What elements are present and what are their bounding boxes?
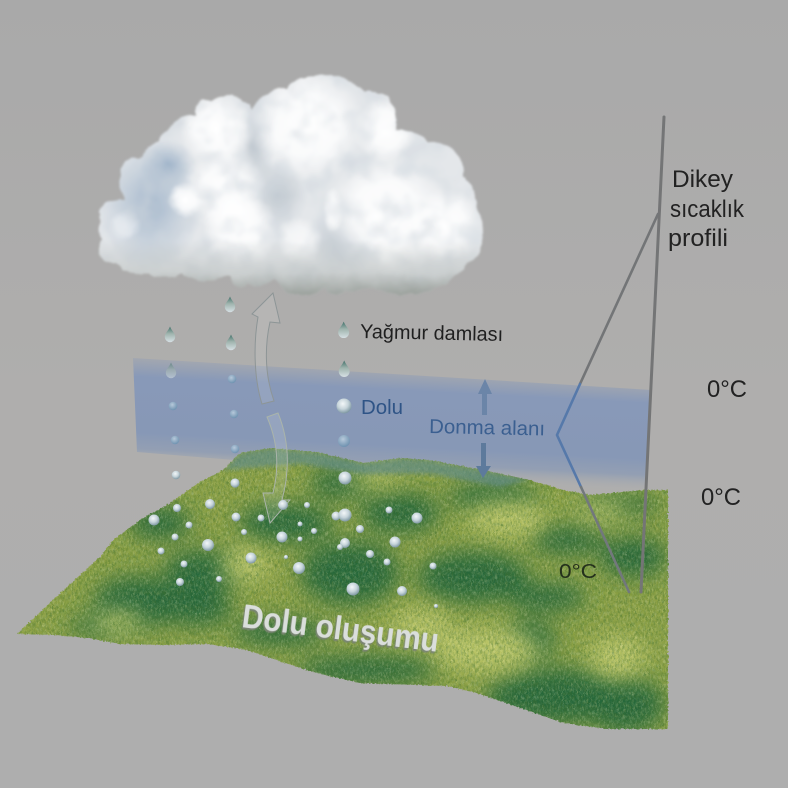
label: Dikey sıcaklık profili: sıcaklık — [670, 196, 745, 223]
infographic: hail formation — [17, 74, 746, 730]
vertical temperature profile lines — [557, 117, 664, 592]
hail stones on the ground — [148, 472, 438, 608]
falling hail stones — [169, 375, 350, 479]
label: 0°C lower: 0°C — [701, 484, 741, 511]
arrow: freezing zone down — [476, 443, 491, 478]
legend raindrop icon — [338, 322, 349, 338]
label: Dikey sıcaklık profili — [668, 166, 745, 252]
label: Dolu: Dolu — [361, 397, 403, 419]
arrow: freezing zone up — [478, 379, 492, 415]
label: Dikey sıcaklık profili: Dikey — [672, 166, 733, 193]
arrow: downdraft — [263, 413, 290, 523]
label: Dikey sıcaklık profili: profili — [668, 225, 728, 252]
falling raindrops — [165, 296, 236, 378]
cloud — [90, 65, 490, 300]
label: Yağmur damlası: Yağmur damlası — [360, 321, 503, 346]
title: Dolu oluşumu: Dolu oluşumu — [240, 597, 441, 659]
far hill edge seen through the freezing zone — [223, 448, 530, 487]
grass field — [17, 448, 669, 730]
arrow: updraft — [252, 293, 280, 404]
label: 0°C upper: 0°C — [707, 376, 747, 403]
legend hail stone icon — [336, 398, 352, 414]
label: Donma alanı: Donma alanı — [429, 416, 545, 440]
freezing zone band — [133, 358, 652, 494]
raindrop entering the freezing zone — [339, 361, 350, 377]
label: 0°C on ground: 0°C — [559, 561, 597, 583]
